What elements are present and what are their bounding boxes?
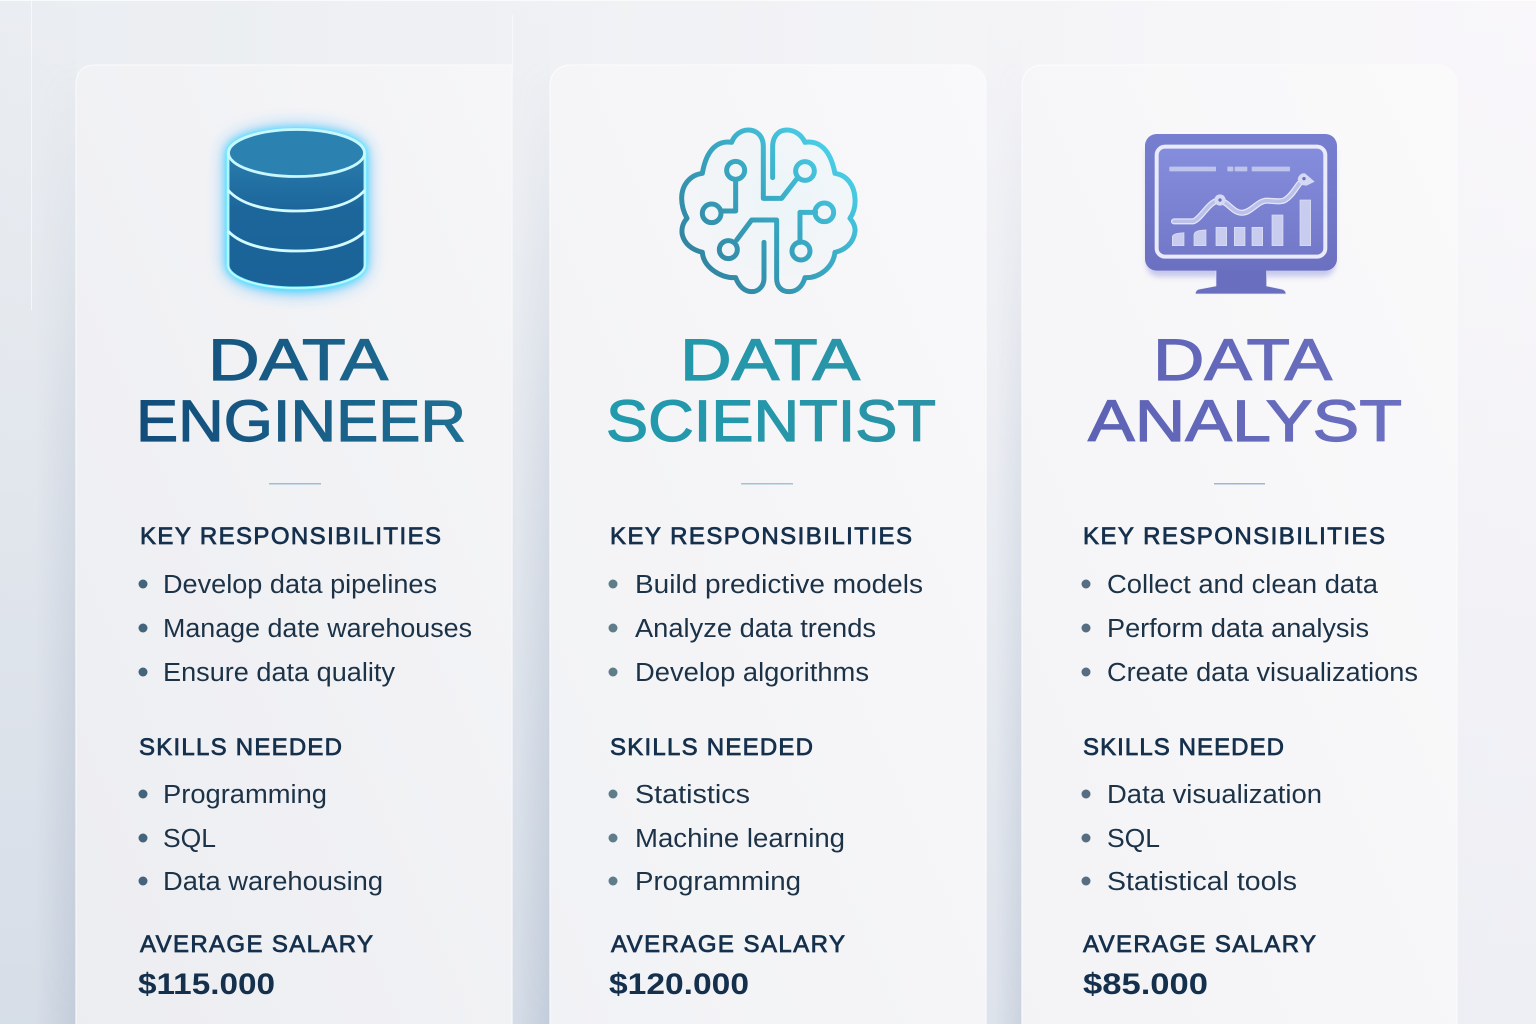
section: average salary <box>609 931 845 1001</box>
bullet list <box>608 781 845 896</box>
bullet list <box>138 781 383 896</box>
bullet list <box>138 571 472 687</box>
bullet list: Statistical tools <box>1107 868 1297 896</box>
heading: data analyst: ANALYST <box>1088 389 1402 454</box>
section heading: AVERAGE SALARY <box>140 931 373 958</box>
bullet list: Build predictive models <box>635 571 923 599</box>
salary value: $85.000 <box>1083 968 1208 1001</box>
card background <box>76 65 512 1024</box>
heading: data engineer: ENGINEER <box>136 389 466 454</box>
heading: data engineer: DATA <box>208 328 388 393</box>
bullet list: Data visualization <box>1107 781 1322 809</box>
panel: data engineer <box>76 65 512 1024</box>
section: skills needed <box>608 734 845 896</box>
panel: data scientist <box>550 65 986 1024</box>
bullet list: Perform data analysis <box>1107 615 1369 643</box>
card background <box>550 65 986 1024</box>
bullet list <box>1082 781 1322 896</box>
icon: database cylinder <box>226 128 367 292</box>
section heading: AVERAGE SALARY <box>1083 931 1316 958</box>
bullet list: SQL <box>1107 825 1160 853</box>
section heading: AVERAGE SALARY <box>611 931 845 958</box>
heading: data scientist: DATA <box>680 328 860 393</box>
heading: data scientist: SCIENTIST <box>606 389 936 454</box>
bullet list <box>1082 571 1418 687</box>
bullet list: Analyze data trends <box>635 615 876 643</box>
icon: monitor with chart <box>1145 134 1337 294</box>
section: average salary <box>138 931 373 1001</box>
card background <box>1022 65 1457 1024</box>
panel: data analyst <box>1022 65 1457 1024</box>
bullet list <box>608 571 923 687</box>
section heading: SKILLS NEEDED <box>610 734 813 761</box>
section: skills needed <box>1082 734 1322 896</box>
section heading: KEY RESPONSIBILITIES <box>140 523 441 550</box>
section heading: SKILLS NEEDED <box>1083 734 1284 761</box>
section heading: KEY RESPONSIBILITIES <box>1083 523 1385 550</box>
bullet list: Statistics <box>635 781 750 809</box>
bullet list: Manage date warehouses <box>163 615 472 643</box>
section heading: SKILLS NEEDED <box>139 734 342 761</box>
section heading: KEY RESPONSIBILITIES <box>610 523 912 550</box>
bullet list: Develop algorithms <box>635 659 869 687</box>
bullet list: Machine learning <box>635 825 845 853</box>
section: key responsibilities <box>138 523 472 687</box>
bullet list: Develop data pipelines <box>163 571 437 599</box>
bullet list: Ensure data quality <box>163 659 395 687</box>
heading: data analyst: DATA <box>1153 328 1332 393</box>
salary value: $115.000 <box>138 968 275 1001</box>
bullet list: Programming <box>163 781 327 809</box>
section: skills needed <box>138 734 383 896</box>
salary value: $120.000 <box>609 968 749 1001</box>
bullet list: SQL <box>163 825 216 853</box>
section: average salary <box>1083 931 1316 1001</box>
bullet list: Programming <box>635 868 801 896</box>
section: key responsibilities <box>1082 523 1418 687</box>
bullet list: Create data visualizations <box>1107 659 1418 687</box>
icon: brain circuit <box>682 130 855 292</box>
bullet list: Collect and clean data <box>1107 571 1379 599</box>
bullet list: Data warehousing <box>163 868 383 896</box>
section: key responsibilities <box>608 523 923 687</box>
